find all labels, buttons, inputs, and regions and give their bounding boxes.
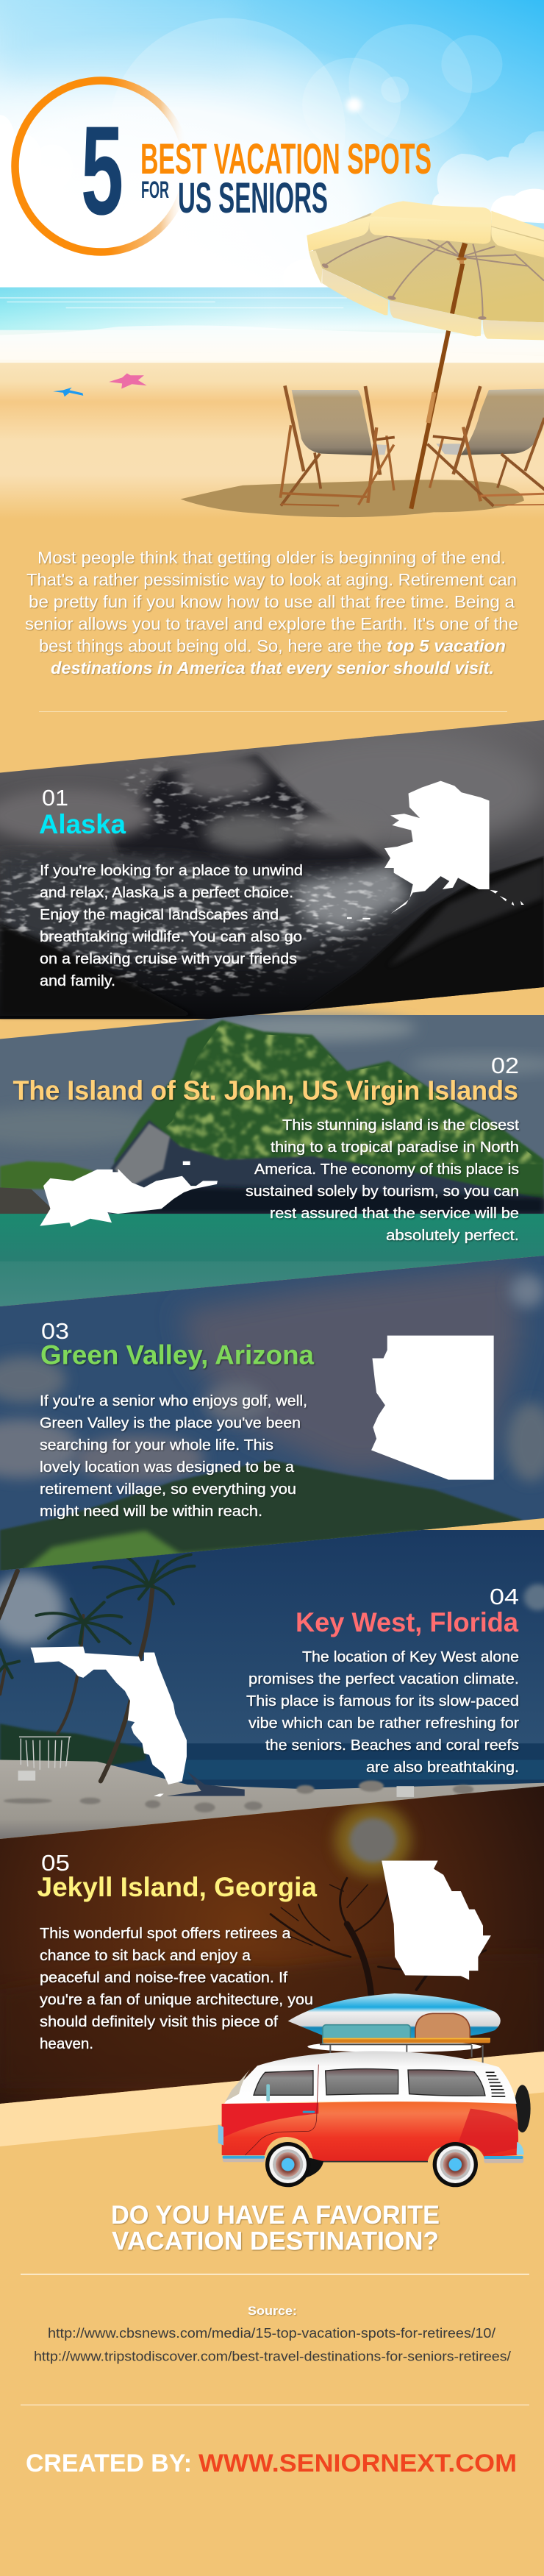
title line 2: us seniors: US SENIORS: [178, 174, 328, 222]
description: you're a fan of unique architecture, you: [40, 1992, 313, 2008]
intro paragraph: That's a rather pessimistic way to look at aging. Retirement can: [26, 570, 517, 589]
description: [40, 863, 303, 989]
heading: Jekyll Island: Jekyll Island, Georgia: [37, 1872, 317, 1902]
light sand band: [0, 2052, 544, 2146]
heading: The Island of St. John: The Island of St. John, US Virgin Islands: [13, 1075, 518, 1106]
intro paragraph: Most people think that getting older is beginning of the end.: [37, 548, 506, 567]
icon: map of Alaska: [347, 781, 524, 919]
hero title: [81, 100, 432, 241]
sand: [0, 363, 544, 519]
starfish: blue: [53, 388, 83, 396]
description: promises the perfect vacation climate.: [248, 1671, 519, 1687]
number 01: 01: [42, 785, 68, 811]
icon: map of Arizona: [371, 1336, 494, 1480]
section 5: Jekyll Island: [37, 1850, 491, 2052]
description: searching for your whole life. This: [40, 1437, 273, 1454]
surfboard and luggage: [288, 1993, 501, 2052]
air vent: [486, 2072, 505, 2096]
intro paragraph: [25, 548, 518, 677]
description: Green Valley is the place you've been: [40, 1415, 301, 1431]
description: If you're looking for a place to unwind: [40, 863, 303, 879]
clouds: [0, 115, 544, 224]
source heading: Source:: [248, 2304, 297, 2318]
section 4: Key West: [31, 1584, 519, 1796]
description: retirement village, so everything you: [40, 1481, 296, 1498]
credit url: WWW.SENIORNEXT.COM: [198, 2449, 517, 2477]
umbrella pole: [411, 243, 467, 509]
description: [246, 1649, 519, 1776]
sky: [0, 0, 544, 289]
hero title ring: [15, 81, 187, 252]
description: heaven.: [40, 2036, 93, 2052]
title line 2: for: FOR: [141, 177, 169, 203]
umbrella ribs: [321, 236, 544, 320]
front wheel: [265, 2142, 323, 2187]
panel: Jekyll Island photo: [0, 1783, 544, 2111]
description: chance to sit back and enjoy a: [40, 1948, 251, 1964]
umbrella and deck chairs: [281, 201, 544, 509]
icon: map of St. John: [40, 1161, 218, 1227]
starfish: pink: [109, 374, 147, 389]
hero beach scene: [0, 0, 544, 519]
closing question: VACATION DESTINATION?: [112, 2227, 439, 2255]
sea: [0, 288, 544, 371]
description: This stunning island is the closest: [282, 1117, 519, 1134]
panel: St. John photo: [0, 1015, 544, 1312]
description: breathtaking wildlife. You can also go: [40, 929, 302, 945]
closing question: DO YOU HAVE A FAVORITE: [111, 2201, 440, 2230]
intro paragraph: best things about being old. So, here are the: [39, 636, 382, 655]
umbrella canopy underside: [307, 213, 544, 322]
section 3: Green Valley: [40, 1318, 494, 1520]
credit label: CREATED BY:: [26, 2449, 192, 2477]
description: might need will be within reach.: [40, 1504, 262, 1520]
bumpers: [218, 2124, 524, 2163]
description: sustained solely by tourism, so you can: [246, 1184, 519, 1200]
right deck chair: [429, 388, 544, 505]
section 1: Alaska: [39, 781, 524, 989]
rear wheel: [433, 2142, 478, 2187]
description: America. The economy of this place is: [254, 1161, 519, 1178]
heading: Key West: Key West, Florida: [296, 1607, 518, 1637]
description: lovely location was designed to be a: [40, 1459, 295, 1476]
van roof and cab: [224, 2051, 517, 2104]
panel: Alaska photo: [0, 717, 544, 1019]
icon: map of Georgia: [382, 1861, 491, 1980]
description: rest assured that the service will be: [270, 1206, 519, 1222]
source list: [34, 2304, 511, 2364]
description: vibe which can be rather refreshing for: [248, 1715, 519, 1732]
description: [40, 1926, 313, 2052]
description: and relax, Alaska is a perfect choice.: [40, 885, 293, 901]
icon: map of Florida: [31, 1646, 187, 1796]
description: on a relaxing cruise with your friends: [40, 951, 297, 967]
source url 2: http://www.tripstodiscover.com/best-travel-destinations-for-seniors-retirees/: [34, 2349, 511, 2364]
intro paragraph: senior allows you to travel and explore the Earth. It's one of the: [25, 614, 518, 633]
description: The location of Key West alone: [302, 1649, 519, 1665]
number 05: 05: [41, 1850, 70, 1876]
description: [246, 1117, 519, 1244]
van with surfboard: [218, 1993, 531, 2187]
numeral 5: 5: [81, 100, 124, 241]
spare wheel: [515, 2085, 531, 2132]
description: peaceful and noise-free vacation. If: [40, 1970, 287, 1986]
heading: Green Valley: Green Valley, Arizona: [40, 1340, 314, 1370]
description: are also breathtaking.: [366, 1760, 519, 1776]
heading: Alaska: Alaska: [39, 809, 126, 839]
description: This place is famous for its slow-paced: [246, 1693, 519, 1709]
number 03: 03: [41, 1318, 69, 1344]
description: Enjoy the magical landscapes and: [40, 907, 279, 923]
description: should definitely visit this piece of: [40, 2014, 278, 2030]
description: thing to a tropical paradise in North: [271, 1139, 519, 1156]
intro paragraph: top 5 vacation: [387, 636, 506, 655]
number 04: 04: [490, 1584, 519, 1609]
shadow under chairs: [180, 480, 524, 517]
description: absolutely perfect.: [386, 1228, 519, 1244]
description: If you're a senior who enjoys golf, well,: [40, 1393, 307, 1409]
closing question: [111, 2201, 440, 2255]
intro paragraph: be pretty fun if you know how to use all that free time. Being a: [29, 592, 515, 611]
mirror: [266, 2084, 270, 2102]
panel: Green Valley photo: [0, 1251, 544, 1573]
description: This wonderful spot offers retirees a: [40, 1926, 291, 1942]
description: the seniors. Beaches and coral reefs: [265, 1737, 519, 1754]
roof rails: [330, 2045, 483, 2066]
source url 1: http://www.cbsnews.com/media/15-top-vacation-spots-for-retirees/10/: [48, 2326, 495, 2341]
description: [40, 1393, 307, 1520]
windows: [226, 2069, 485, 2102]
lens flare circles: [123, 18, 503, 143]
umbrella canopy top: [307, 201, 544, 340]
panel: Key West photo: [0, 1530, 544, 1858]
section 2: The Island of St. John: [13, 1053, 519, 1244]
van body: [222, 2102, 518, 2161]
number 02: 02: [491, 1053, 519, 1078]
intro paragraph: destinations in America that every senior should visit.: [51, 658, 494, 677]
created by credit: [26, 2449, 517, 2477]
description: and family.: [40, 973, 115, 989]
left deck chair: [281, 388, 394, 505]
